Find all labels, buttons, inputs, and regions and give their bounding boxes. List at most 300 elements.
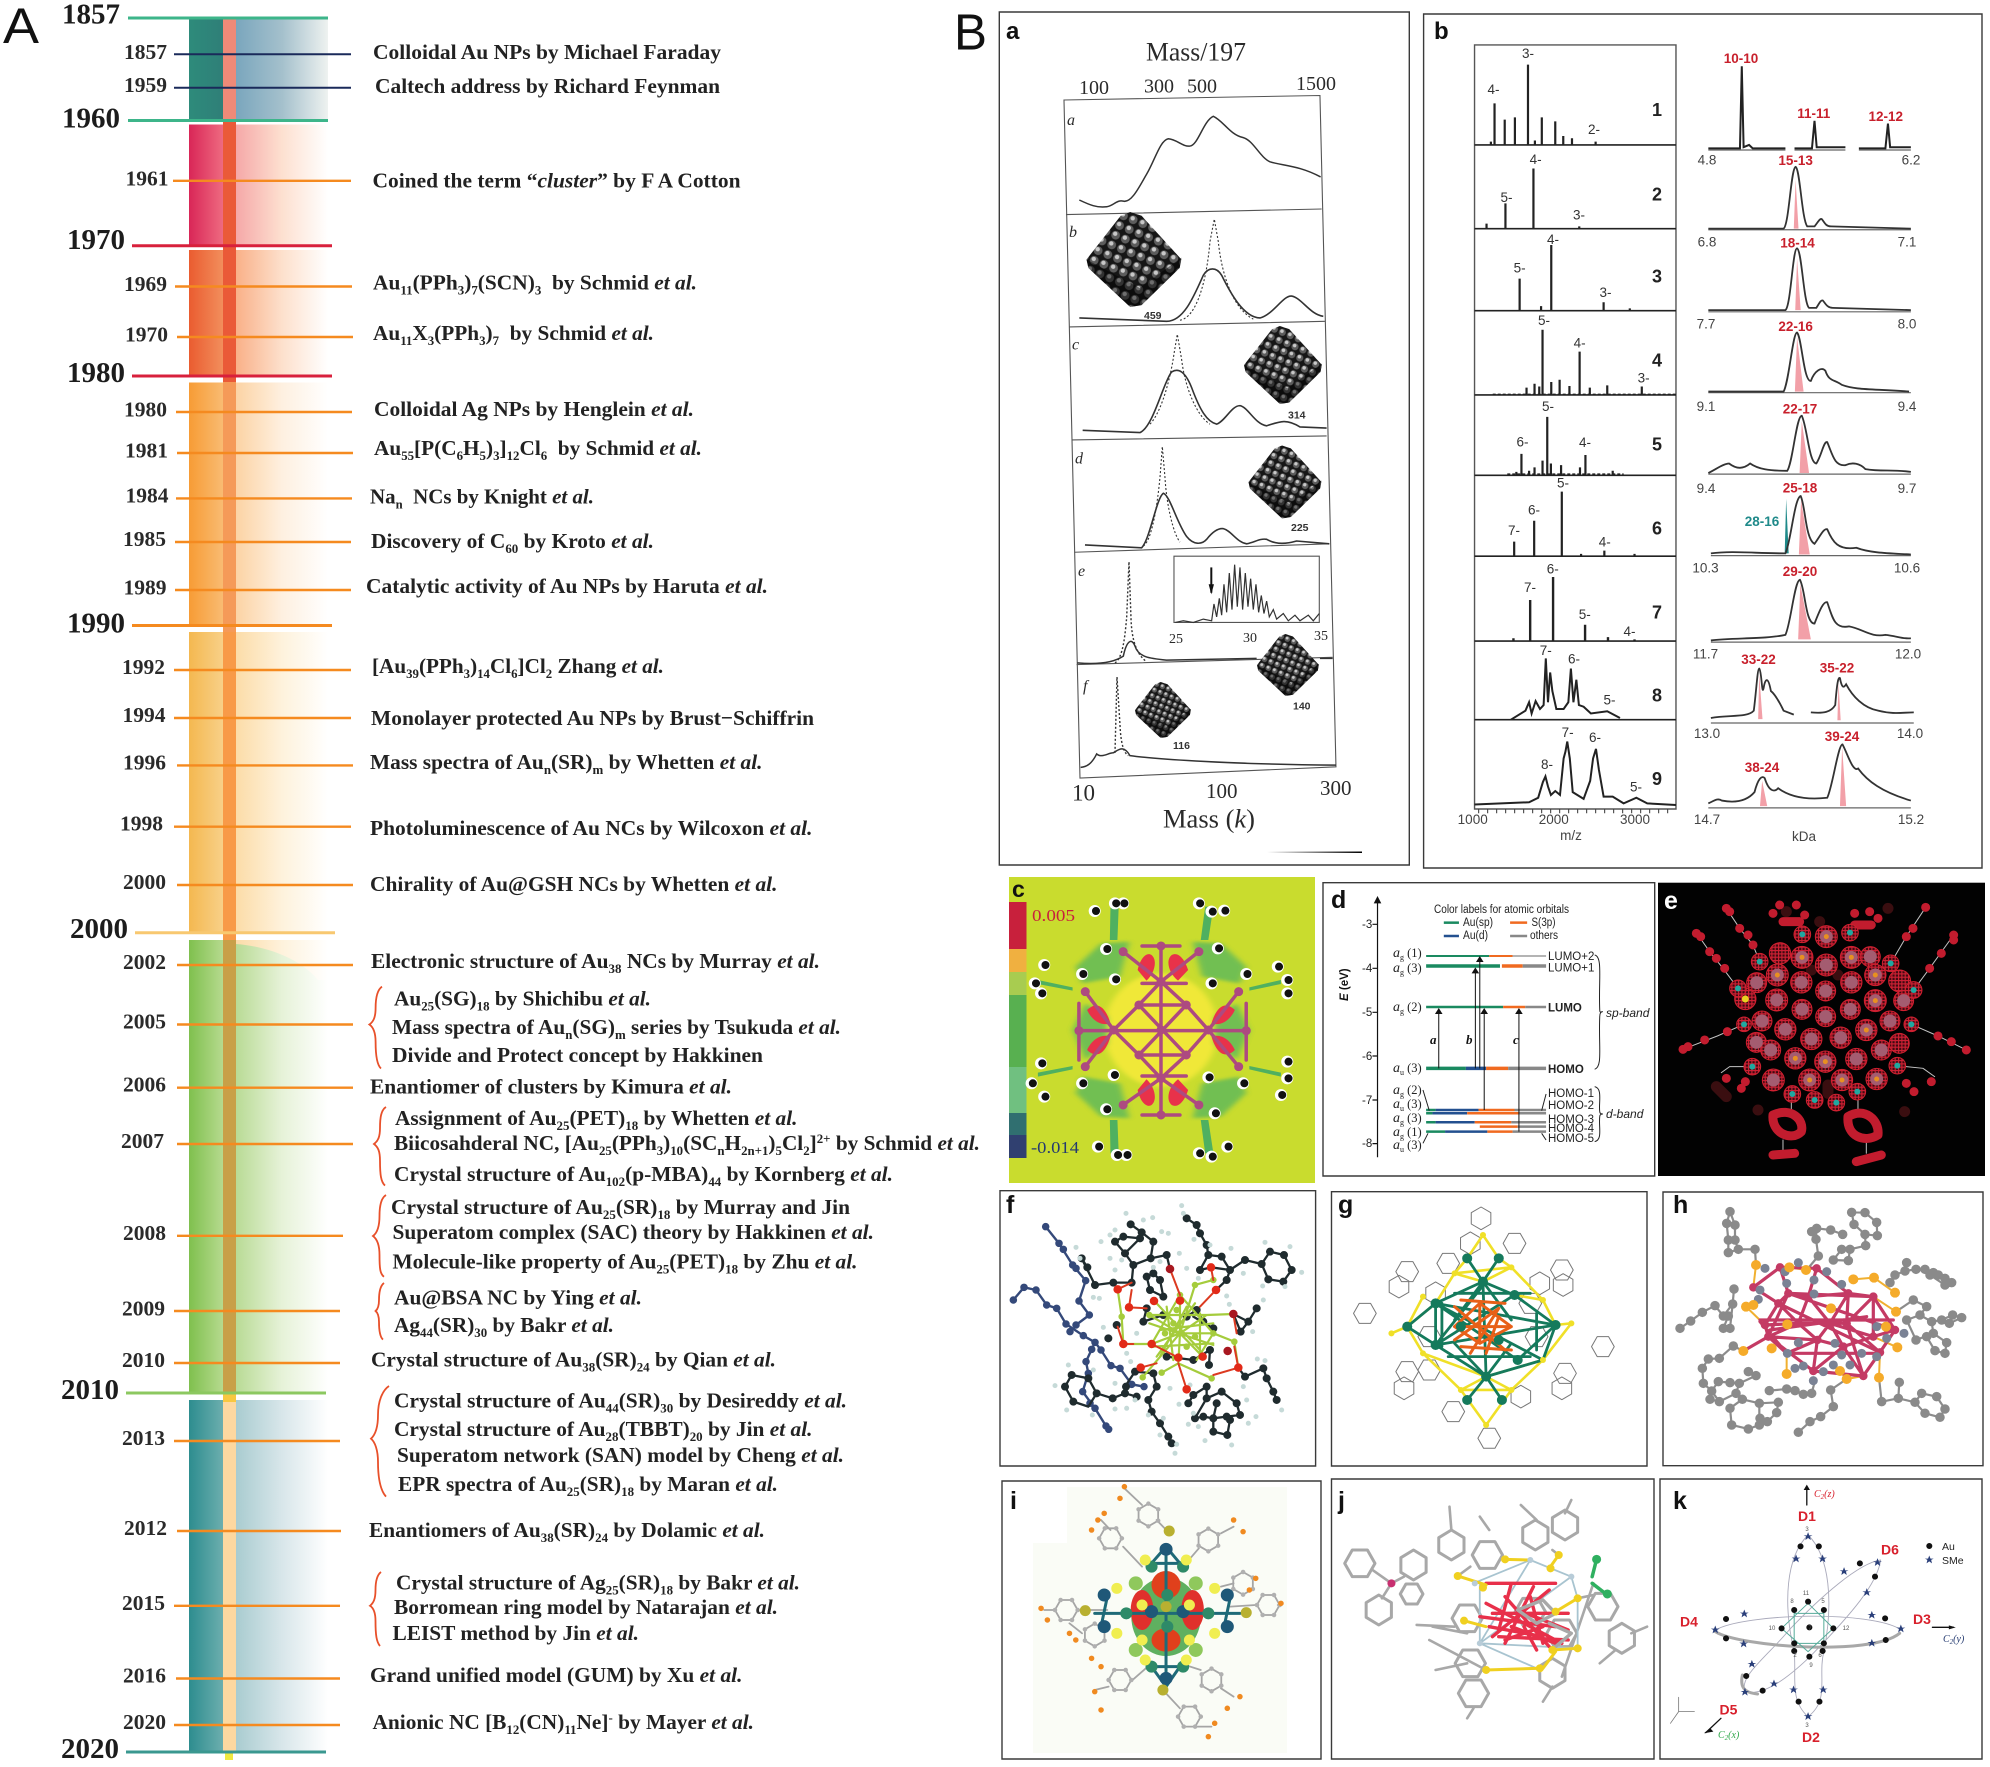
axis numbers: 1000 <box>1458 812 1488 827</box>
legend and level labels: d-band <box>1606 1107 1644 1121</box>
charge labels: 7- <box>1524 580 1536 595</box>
red composition labels: 15-13 <box>1778 153 1813 168</box>
event 1981: 5 <box>480 448 486 463</box>
axis and curve labels: 116 <box>1173 740 1190 752</box>
charge labels: 8- <box>1541 757 1553 772</box>
legend and level labels: -7 <box>1362 1095 1372 1107</box>
event 1981: H <box>463 436 480 460</box>
diagram labels: 11 <box>1803 1591 1810 1597</box>
event 2000 <box>123 870 778 896</box>
event 2016: 2016 <box>123 1664 166 1688</box>
axis and curve labels: 225 <box>1291 522 1309 534</box>
event 2002: et al. <box>777 949 820 973</box>
legend and level labels: HOMO-2 <box>1548 1100 1594 1112</box>
decade markers: 1960 <box>62 103 120 135</box>
event 2012: 24 <box>595 1530 609 1545</box>
diagram labels: 3 <box>1805 1527 1809 1533</box>
legend and level labels: (1) <box>1404 1125 1422 1139</box>
event 1970: 11 <box>400 333 412 348</box>
event 2007: Crystal structure of Au <box>394 1162 607 1186</box>
axis and curve labels: 30 <box>1243 631 1257 646</box>
axis and curve labels: 300 <box>1320 776 1352 800</box>
event 2007: n <box>717 1143 725 1158</box>
event 2007: 5 <box>776 1143 782 1158</box>
legend and level labels: HOMO-3 <box>1548 1114 1594 1126</box>
axis numbers: 9.4 <box>1697 481 1716 496</box>
event 1996: n <box>544 762 552 777</box>
event 1969: ) <box>464 271 471 295</box>
decade markers: 1970 <box>67 224 125 256</box>
event 2007: ) <box>663 1131 670 1155</box>
event 2007: ) <box>768 1131 776 1155</box>
diagram labels: 2 <box>1793 1653 1797 1659</box>
event 1984: NCs by Knight <box>403 484 552 508</box>
label g: g <box>1338 1191 1353 1219</box>
event 1984 <box>126 484 594 512</box>
event 2015: 18 <box>660 1583 674 1598</box>
axis numbers: 14.0 <box>1897 726 1923 741</box>
charge labels: 4- <box>1599 535 1611 550</box>
event 2007: 3 <box>657 1143 664 1158</box>
event 1992: Zhang <box>552 654 622 678</box>
legend and level labels: (2) <box>1404 1000 1422 1014</box>
legend and level labels: (3) <box>1404 1111 1422 1125</box>
axis and curve labels: b <box>1069 224 1077 241</box>
event 2007: (SC <box>683 1131 717 1155</box>
legend and level labels: HOMO-4 <box>1548 1123 1595 1135</box>
legend and level labels: HOMO <box>1548 1064 1584 1076</box>
event 2015: Crystal structure of Ag <box>396 1571 608 1595</box>
event 1992: et al. <box>622 654 664 678</box>
event 2013: 20 <box>690 1429 703 1444</box>
event 1981: Cl <box>519 436 541 460</box>
diagram labels: D5 <box>1720 1702 1738 1718</box>
charge labels: 5- <box>1500 190 1513 205</box>
event 2008: Crystal structure of Au <box>391 1195 604 1219</box>
axis and curve labels: 100 <box>1206 779 1238 803</box>
charge labels: 7- <box>1562 725 1574 740</box>
event 2009: Au@BSA NC by Ying et al. <box>394 1286 642 1310</box>
event 2016 <box>123 1663 742 1688</box>
decade markers: 1990 <box>67 608 125 640</box>
scale values: 0.005 <box>1032 906 1075 925</box>
event 2009: (SR) <box>433 1313 474 1337</box>
wire-mesh atoms <box>1683 905 1966 1162</box>
axis and curve labels: d <box>1075 450 1084 468</box>
axis and curve labels: 500 <box>1187 76 1217 98</box>
diagram labels: C <box>1718 1730 1725 1741</box>
event 1969: 1969 <box>124 272 167 296</box>
event 1980: Colloidal Ag NPs by Henglein et al. <box>374 397 694 421</box>
charge labels: 2- <box>1588 122 1600 137</box>
event 2015: 2015 <box>122 1591 165 1615</box>
label c: c <box>1012 876 1025 902</box>
legend and level labels: (3) <box>1404 1138 1422 1152</box>
legend and level labels: g <box>1400 953 1404 962</box>
event 2008: Superatom complex (SAC) theory by Hakkinen et al. <box>392 1220 874 1244</box>
event 2013: et al. <box>804 1389 847 1413</box>
event 1998: Photoluminescence of Au NCs by Wilcoxon et al. <box>370 816 812 840</box>
event 2007: 2007 <box>121 1129 164 1153</box>
diagram labels: 2 <box>1821 1493 1825 1501</box>
event 2009: 2009 <box>122 1296 165 1320</box>
event 1969: et al. <box>654 271 697 295</box>
event 2005: by Shichibu <box>490 986 608 1010</box>
event 1984: 1984 <box>126 484 169 508</box>
charge labels: 5- <box>1579 607 1591 622</box>
event 1994: Monolayer protected Au NPs by Brust−Schiffrin <box>371 706 814 730</box>
event 2005: Au <box>394 986 421 1010</box>
charge labels: 6- <box>1589 730 1601 745</box>
diagram labels <box>1680 1489 1965 1745</box>
event 1969: by Schmid <box>541 271 654 295</box>
legend and level labels: a <box>1393 961 1400 976</box>
axis numbers: 7.7 <box>1697 317 1715 332</box>
axis and curve labels: 100 <box>1079 77 1109 99</box>
cluster models <box>1086 212 1322 738</box>
axis numbers: 2000 <box>1539 812 1569 827</box>
event 1989: Catalytic activity of Au NPs by Haruta et al. <box>366 574 768 598</box>
panel e: electron density map <box>1658 883 1985 1176</box>
energy levels and arrows <box>1372 896 1603 1157</box>
diagram labels: C <box>1814 1489 1821 1500</box>
event 2008: (PET) <box>669 1250 725 1274</box>
axis numbers: 10.6 <box>1894 560 1920 575</box>
event 2013: by Jin <box>703 1417 770 1441</box>
red composition labels: 29-20 <box>1783 564 1817 579</box>
legend and level labels: a <box>1393 1000 1400 1015</box>
event 1970 <box>125 321 654 348</box>
legend and level labels: LUMO+1 <box>1548 962 1594 974</box>
legend and level labels: sp-band <box>1606 1006 1650 1020</box>
event 2006: Enantiomer of clusters by Kimura et al. <box>370 1074 732 1098</box>
event 2010: 2010 <box>122 1348 165 1372</box>
axis and curve labels: 25 <box>1169 632 1183 647</box>
event 2007: by Schmid <box>831 1131 937 1155</box>
axis numbers: 3000 <box>1620 812 1650 827</box>
decade markers: 2000 <box>70 913 128 945</box>
legend and level labels: a <box>1393 1097 1400 1112</box>
event 2010: (SR) <box>595 1348 637 1372</box>
event 2012: (SR) <box>554 1518 595 1542</box>
event 2007: 2 <box>803 1143 810 1158</box>
diagram labels: 12 <box>1843 1626 1850 1632</box>
label b: b <box>1434 18 1449 45</box>
legend and level labels: HOMO-1 <box>1548 1088 1594 1100</box>
charge labels: 7- <box>1540 643 1552 658</box>
event 2013: 18 <box>621 1484 635 1499</box>
event 1985: by Kroto <box>518 529 611 553</box>
event 2013: Crystal structure of Au <box>394 1417 607 1441</box>
event 1992: Cl <box>490 654 511 678</box>
spectrum numbers: 8 <box>1652 686 1662 706</box>
event 2008: Molecule-like property of Au <box>392 1250 658 1274</box>
legend and level labels: -3 <box>1362 919 1372 931</box>
event 1981: et al. <box>659 436 702 460</box>
event 1959 <box>124 73 720 98</box>
charge labels: 3- <box>1599 285 1612 300</box>
event 2007: Assignment of Au <box>395 1106 557 1130</box>
event 2007: 10 <box>670 1143 683 1158</box>
event 1981: 6 <box>457 448 463 463</box>
axis numbers: 12.0 <box>1895 646 1921 661</box>
label f: f <box>1006 1191 1015 1219</box>
diagram labels: (z) <box>1824 1489 1835 1500</box>
legend and level labels: g <box>1400 1118 1404 1127</box>
stick model <box>1345 1500 1647 1718</box>
event 1992: [Au <box>372 654 407 678</box>
charge labels: 5- <box>1538 313 1550 328</box>
event 1985: Discovery of C <box>371 529 506 553</box>
event 1970: 3 <box>479 333 486 348</box>
label d: d <box>1331 886 1346 914</box>
event 1992: 2 <box>546 666 552 681</box>
event 1985: 1985 <box>123 527 166 551</box>
event 1970: by Schmid <box>499 321 611 345</box>
axis numbers: 15.2 <box>1898 812 1924 827</box>
charge labels: 4- <box>1579 435 1591 450</box>
legend and level labels <box>1339 904 1650 1154</box>
diagram labels: 6 <box>1818 1653 1822 1659</box>
panel k: structural diagram <box>1660 1479 1982 1759</box>
event 2020: by Mayer <box>613 1710 711 1734</box>
axis numbers: kDa <box>1792 829 1816 844</box>
event 1959: 1959 <box>124 73 167 97</box>
axis numbers: m/z <box>1560 828 1582 843</box>
event 2009 <box>122 1283 642 1340</box>
event 2007: 25 <box>599 1143 612 1158</box>
event 2005: 18 <box>477 998 490 1014</box>
panel d: energy level diagram <box>1323 883 1655 1176</box>
event 1996: et al. <box>720 750 762 774</box>
event 1970: Au <box>373 321 400 345</box>
event 2005: Divide and Protect concept by Hakkinen <box>392 1043 763 1067</box>
panel g: cluster crystal structure <box>1332 1191 1647 1466</box>
diagram labels: 5 <box>1821 1599 1825 1605</box>
event 2002: 2002 <box>123 950 166 974</box>
event 2020: Anionic NC [B <box>372 1710 507 1734</box>
event 2002: 38 <box>609 961 622 976</box>
decade markers <box>61 0 335 1765</box>
panel c: charge density map <box>1009 876 1315 1183</box>
event 1970: 1970 <box>125 322 168 346</box>
legend and level labels: LUMO+2 <box>1548 951 1594 963</box>
event 1970: X <box>412 321 428 345</box>
event 2008: 18 <box>657 1207 671 1222</box>
diagram labels: (y) <box>1953 1634 1965 1645</box>
legend and level labels: a <box>1393 1061 1400 1076</box>
event 2008: 25 <box>603 1207 616 1222</box>
event 2007: 102 <box>606 1174 625 1189</box>
panel letter B: B <box>954 4 987 60</box>
red composition labels: 35-22 <box>1820 660 1854 675</box>
decade markers: 2020 <box>61 1733 119 1765</box>
event 1996: (SR) <box>551 750 593 774</box>
event 1961 <box>126 166 741 193</box>
event 2013: et al. <box>735 1472 778 1496</box>
event 2007: 2n+1 <box>741 1143 768 1158</box>
event 1981: [P(C <box>414 436 457 460</box>
legend and level labels: (2) <box>1404 1083 1422 1097</box>
event 1961: 1961 <box>126 166 168 190</box>
event 2007: et al. <box>755 1106 798 1130</box>
event 2007: by Whetten <box>638 1106 755 1130</box>
legend and level labels: HOMO-5 <box>1548 1133 1594 1145</box>
event 2009: by Bakr <box>487 1313 571 1337</box>
charge labels: 6- <box>1547 562 1559 576</box>
event 2013: et al. <box>770 1417 812 1441</box>
event 1992 <box>122 654 664 681</box>
event 2008: 18 <box>725 1262 739 1276</box>
legend and level labels: Color labels for atomic orbitals <box>1434 904 1569 916</box>
event 2005: n <box>565 1027 573 1042</box>
axis and curve labels: c <box>1072 336 1079 354</box>
panel c: charge density map: -0.014 <box>1031 1138 1080 1157</box>
event 1969: Au <box>373 271 400 295</box>
panel h: cluster crystal structure <box>1663 1191 1983 1466</box>
event 2020: 2020 <box>123 1710 166 1734</box>
event 2013: 30 <box>660 1401 673 1416</box>
legend and level labels: LUMO <box>1548 1002 1582 1014</box>
legend and level labels: (3) <box>1404 961 1422 975</box>
legend and level labels: a <box>1393 1125 1400 1140</box>
red composition labels: 25-18 <box>1783 481 1818 496</box>
diagram labels: D4 <box>1680 1614 1698 1630</box>
diagram labels: 7 <box>1808 1626 1812 1632</box>
event 1998 <box>120 812 812 840</box>
timeline colour bars <box>189 18 328 1760</box>
axis and curve labels: a <box>1067 112 1075 129</box>
event 2007: (p-MBA) <box>625 1162 708 1186</box>
decade markers: 1980 <box>67 357 125 389</box>
event 1984: Na <box>370 484 396 508</box>
red composition labels: 22-16 <box>1778 319 1813 334</box>
event 2010: by Qian <box>650 1348 733 1372</box>
spectrum numbers: 9 <box>1652 769 1662 789</box>
charge labels: 5- <box>1542 399 1554 414</box>
ball model <box>1680 1212 1962 1432</box>
axis and curve labels: e <box>1078 563 1085 580</box>
event 1981: 1981 <box>125 438 168 462</box>
event 2013: 2013 <box>122 1426 165 1450</box>
legend and level labels: -8 <box>1362 1138 1372 1150</box>
axis numbers: 6.2 <box>1902 153 1920 168</box>
axis numbers <box>1458 153 1924 844</box>
rings and atoms <box>1670 1485 1956 1733</box>
panel f: cluster crystal structure <box>1000 1191 1316 1466</box>
legend and level labels: others <box>1530 930 1558 942</box>
event 2000: Chirality of Au@GSH NCs by Whetten et al. <box>370 872 778 896</box>
legend and level labels: a <box>1393 1083 1400 1098</box>
event 2005: series by Tsukuda <box>626 1015 798 1039</box>
event 1984: et al. <box>552 484 594 508</box>
event 1996: 1996 <box>123 750 166 774</box>
charge labels: 5- <box>1557 476 1569 491</box>
event 2013: 44 <box>606 1401 619 1416</box>
panel A: research timeline <box>3 0 980 1765</box>
event 1969: 3 <box>458 283 465 298</box>
charge labels: 5- <box>1630 780 1642 794</box>
legend and level labels: u <box>1400 1068 1404 1077</box>
event 2012: et al. <box>722 1518 765 1542</box>
event 1981: 6 <box>541 448 548 463</box>
event 2012: by Dolamic <box>608 1518 722 1542</box>
event 1970: 3 <box>428 333 435 348</box>
right deconvoluted spectra <box>1708 66 1914 808</box>
charge labels: 3- <box>1522 46 1534 61</box>
event 1985: et al. <box>611 529 654 553</box>
red composition labels: 12-12 <box>1869 109 1903 124</box>
event 1970: et al. <box>611 321 654 345</box>
density molecule <box>1032 903 1289 1157</box>
event 2009: Ag <box>394 1313 420 1337</box>
charge labels: 4- <box>1623 624 1636 639</box>
event 1961: Coined the term “cluster” by F A Cotton <box>372 169 741 193</box>
event 1969: (PPh <box>413 271 458 295</box>
legend and level labels: c <box>1513 1032 1519 1047</box>
event 2005: 2005 <box>123 1010 166 1034</box>
charge labels: 7- <box>1508 523 1520 538</box>
event 1992: 1992 <box>122 655 165 679</box>
event 1959: Caltech address by Richard Feynman <box>375 74 720 98</box>
legend and level labels: (3) <box>1404 1097 1422 1111</box>
legend and level labels: u <box>1400 1145 1404 1154</box>
red composition labels: 33-22 <box>1741 652 1776 667</box>
charge labels: 4- <box>1530 152 1542 167</box>
event 1970: ) <box>486 321 493 345</box>
legend and level labels: g <box>1400 1132 1404 1141</box>
legend and level labels: E (eV) <box>1339 968 1351 1001</box>
event 1981: 12 <box>507 448 519 463</box>
axis numbers: 10.3 <box>1692 560 1719 575</box>
spectrum numbers: 2 <box>1652 184 1662 204</box>
event 1980 <box>124 397 694 422</box>
event 2008: (SR) <box>616 1195 657 1219</box>
event 2010 <box>122 1348 776 1374</box>
diagram labels: 8 <box>1790 1599 1794 1605</box>
event 1996: m <box>593 762 603 777</box>
decade markers: 2010 <box>61 1374 119 1406</box>
event 2000: 2000 <box>123 870 166 894</box>
diagram labels: C <box>1943 1634 1950 1645</box>
charge labels: 6- <box>1528 502 1540 518</box>
event 1857: 1857 <box>124 40 167 64</box>
event 1984: n <box>396 496 403 512</box>
diagram labels: 10 <box>1769 1626 1776 1632</box>
event 1969: 11 <box>400 283 413 298</box>
diagram labels: 2 <box>1950 1638 1954 1646</box>
axis and curve labels: Mass/197 <box>1146 38 1246 67</box>
diagram labels: 3 <box>1805 1723 1809 1729</box>
legend and level labels: -4 <box>1362 963 1373 975</box>
axis and curve labels: 314 <box>1288 410 1306 422</box>
charge labels: 3- <box>1573 208 1585 223</box>
event 2007: 2+ <box>817 1131 831 1146</box>
axis numbers: 14.7 <box>1694 812 1720 827</box>
legend and level labels: (1) <box>1404 946 1422 960</box>
legend and level labels: a <box>1393 1138 1400 1153</box>
event 2007: H <box>725 1131 741 1155</box>
event 2015: Borromean ring model by Natarajan et al. <box>394 1595 778 1619</box>
event 2020: 11 <box>564 1722 577 1737</box>
event 1857: Colloidal Au NPs by Michael Faraday <box>373 40 721 64</box>
event 2015: et al. <box>757 1571 800 1595</box>
axis and curve labels: 10 <box>1072 780 1095 806</box>
event 2007: 18 <box>625 1118 639 1133</box>
event 2008: by Zhu <box>738 1250 815 1274</box>
left spectra stack <box>1475 45 1676 811</box>
event 2013: by Maran <box>634 1472 735 1496</box>
